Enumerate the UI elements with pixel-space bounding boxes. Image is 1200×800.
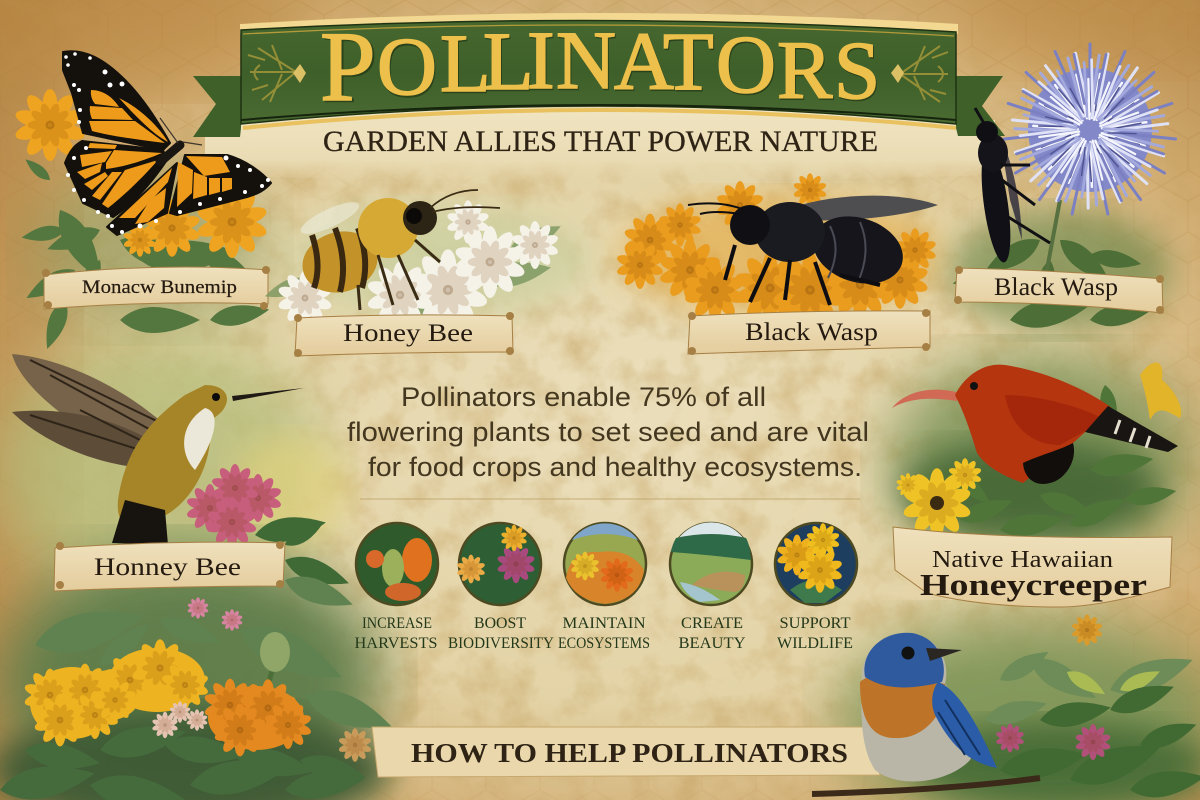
butterfly orange cells [77,90,232,224]
icon labels: ECOSYSTEMS [558,635,650,652]
icon labels: BIODIVERSITY [448,635,554,652]
panel: how to help banner [372,727,880,777]
icon: support wildlife [775,523,857,605]
icon labels: CREATE [681,615,743,632]
illustration: globe thistle with wasp [951,42,1178,333]
title: P [322,12,378,124]
label: Black Wasp center [688,309,930,355]
banner tails [193,76,1005,137]
illustration: pink flower [186,464,353,594]
icon labels: BOOST [474,615,527,632]
label: Black Wasp right [954,266,1164,314]
illustration: black wasp on orange flowers [616,173,938,328]
icon labels: SUPPORT [780,615,851,632]
label: Honey Bee: Honey Bee [343,320,473,347]
illustration: monarch butterfly on marigolds [13,51,271,352]
panel: how to help banner: HOW TO HELP POLLINATORS [411,738,848,768]
illustration: eastern bluebird [812,633,1040,794]
panel: title banner: P [320,11,376,122]
illustration: lower-left marigold garden [0,569,397,800]
thistle head [1001,42,1178,219]
label: Honney Bee: Honney Bee [94,554,241,581]
icon: increase harvests [356,523,438,605]
icon labels: INCREASE [362,615,432,632]
banner ornaments [248,45,948,102]
label: Honney Bee [54,541,285,591]
icon labels: BEAUTY [678,635,746,652]
central description text [347,382,869,482]
label: Native Hawaiian Honeycreeper: Native Hawaiian [932,547,1113,573]
label: Monacw Bunemip: Monacw Bunemip [82,277,237,298]
title: OLLINATORS [378,16,881,118]
subtitle: GARDEN ALLIES THAT POWER NATURE [323,125,878,158]
label: Monacw Bunemip [42,266,270,310]
wasp on thistle [1000,135,1022,240]
label: Native Hawaiian Honeycreeper: Honeycreeper [920,567,1147,602]
yellow marigolds [23,639,209,746]
central description text: Pollinators enable 75% of all [401,382,766,412]
icon: boost biodiversity [456,523,541,605]
illustration: honey bee on white blossoms [262,190,565,331]
label: Native Hawaiian Honeycreeper [893,527,1172,607]
orange marigold [203,679,312,756]
central description text: flowering plants to set seed and are vital [347,417,869,447]
icon labels: WILDLIFE [777,635,853,652]
icon: maintain ecosystems [564,523,646,605]
illustration: hummingbird [12,354,304,545]
illustration: lower-right foliage [982,614,1200,800]
icon labels: MAINTAIN [562,615,646,632]
panel: title banner [193,11,1005,182]
label: Black Wasp center: Black Wasp [745,319,878,346]
illustration: red honeycreeper with flowers [892,362,1181,540]
icon labels: HARVESTS [354,635,438,652]
icon: create beauty [670,522,752,605]
central description text: for food crops and healthy ecosystems. [368,452,862,482]
label: Honey Bee [294,312,514,357]
background foliage washes [0,170,1200,800]
butterfly black base [63,51,271,235]
label: Black Wasp right: Black Wasp [994,274,1118,301]
icon labels [354,615,853,652]
panel: title banner: OLLINATORS [377,14,880,116]
